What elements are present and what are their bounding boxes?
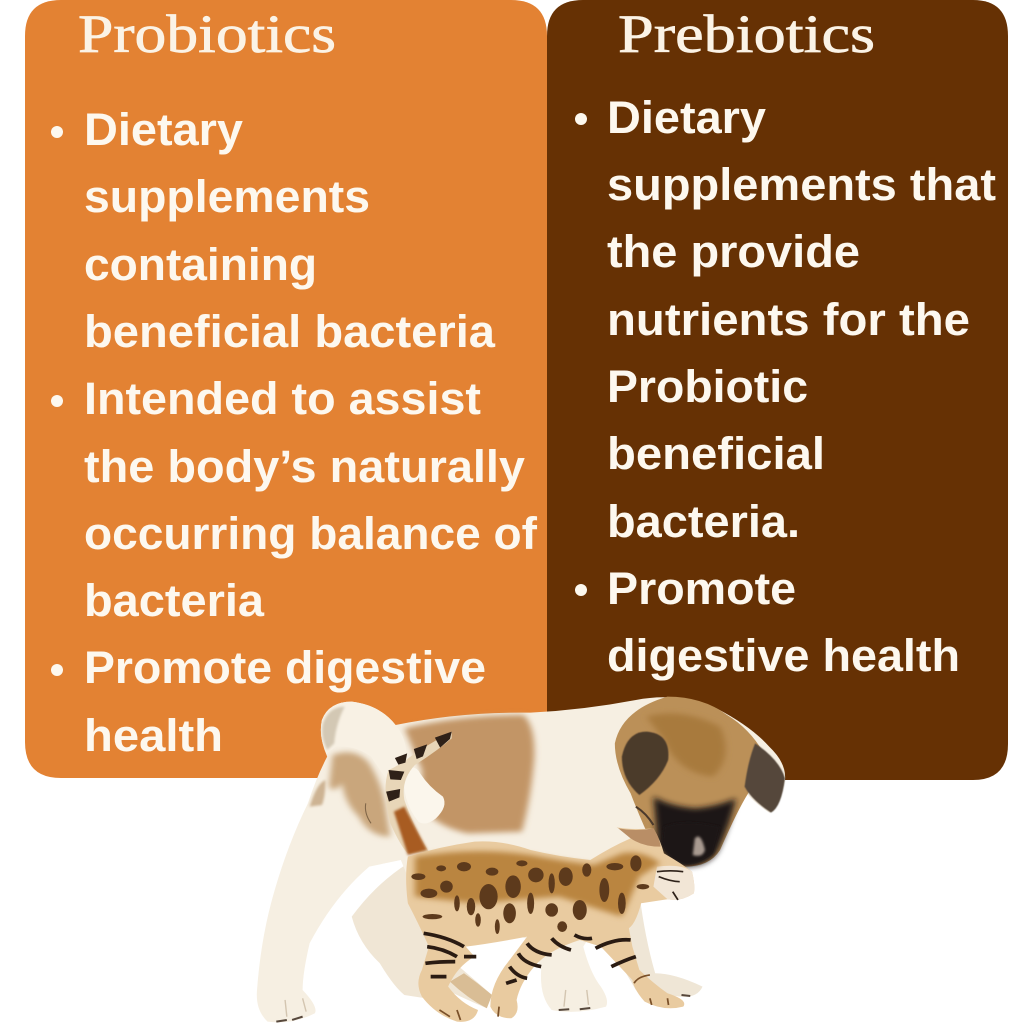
list: probiotics points: health [84, 710, 223, 761]
puppy near ear [622, 732, 668, 795]
list: probiotics points: containing [84, 239, 317, 290]
list: prebiotics points: nutrients for the [607, 294, 970, 345]
list: probiotics points: supplements [84, 171, 370, 222]
list: probiotics points: beneficial bacteria [84, 306, 496, 357]
list: prebiotics points: digestive health [607, 630, 960, 681]
list: prebiotics points: supplements that [607, 159, 996, 210]
list: probiotics points [51, 104, 538, 761]
list: prebiotics points: the provide [607, 226, 860, 277]
list: probiotics points: Intended to assist [84, 373, 481, 424]
puppy hip patch [329, 752, 390, 837]
list: prebiotics points: Dietary [607, 92, 766, 143]
kitten tail [385, 732, 452, 853]
list: prebiotics points: Promote [607, 563, 796, 614]
illustration: puppy [257, 697, 785, 1022]
list: probiotics points: the body’s naturally [84, 441, 525, 492]
kitten leg stripes [424, 933, 636, 983]
list: prebiotics points: Probiotic [607, 361, 808, 412]
puppy paws [276, 995, 690, 1022]
kitten body [406, 827, 694, 1022]
puppy far ear [745, 743, 785, 813]
heading: prebiotics: Prebiotics [618, 4, 875, 64]
puppy head [615, 697, 766, 867]
list: probiotics points: Promote digestive [84, 642, 486, 693]
puppy curled tail [321, 702, 406, 780]
puppy muzzle [653, 797, 736, 867]
list: probiotics points: occurring balance of [84, 508, 538, 559]
list: prebiotics points: beneficial [607, 428, 825, 479]
illustration: kitten [385, 732, 694, 1022]
puppy saddle patch [404, 715, 534, 833]
list: probiotics points: Dietary [84, 104, 243, 155]
panel: probiotics [25, 0, 547, 778]
illustration: puppy and kitten [257, 697, 785, 1022]
panel: prebiotics [547, 0, 1008, 780]
heading: probiotics: Probiotics [78, 4, 336, 64]
list: probiotics points: bacteria [84, 575, 265, 626]
list: prebiotics points [575, 92, 996, 681]
list: prebiotics points: bacteria. [607, 496, 800, 547]
kitten coat markings [411, 851, 660, 934]
